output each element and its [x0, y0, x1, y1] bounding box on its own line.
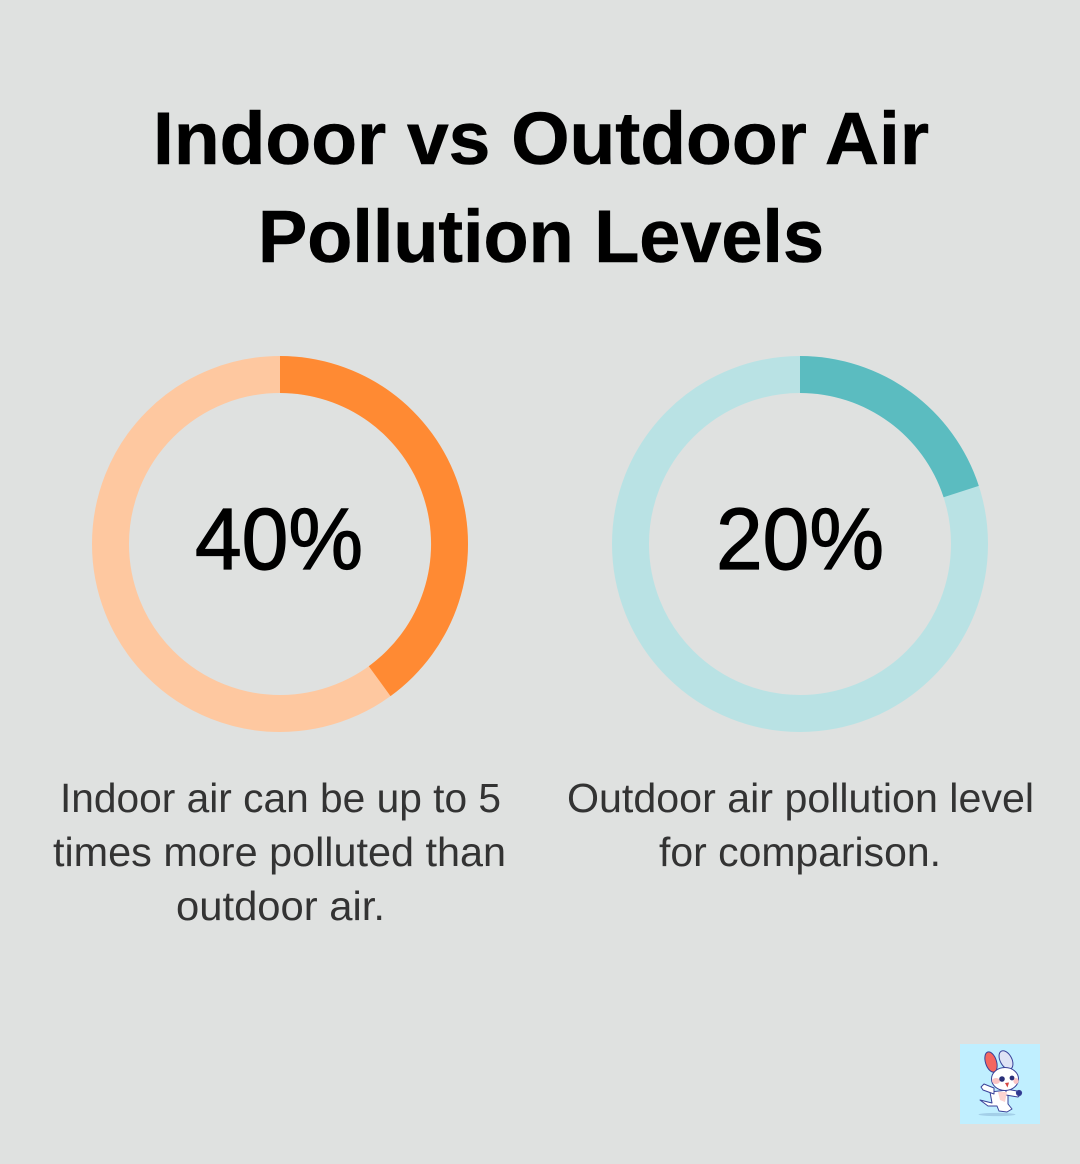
value: 20%: 20% — [716, 491, 884, 588]
panel: outdoor air — [567, 356, 1034, 875]
description: outdoor air: Outdoor air pollution level — [567, 775, 1034, 821]
description: indoor air — [53, 775, 506, 929]
icon: rabbit logo — [960, 1044, 1040, 1124]
description: indoor air: outdoor air. — [176, 883, 385, 929]
donut chart: outdoor 20% — [630, 356, 979, 714]
description: outdoor air — [567, 775, 1034, 875]
donut chart: indoor 40% — [110, 356, 468, 714]
description: indoor air: times more polluted than — [53, 829, 506, 875]
description: outdoor air: for comparison. — [659, 829, 941, 875]
value: 40%: 40% — [195, 491, 363, 588]
title — [153, 97, 929, 278]
description: indoor air: Indoor air can be up to 5 — [60, 775, 501, 821]
panel: indoor air — [53, 356, 506, 929]
title: Indoor vs Outdoor Air — [153, 97, 929, 180]
title: Pollution Levels — [258, 195, 824, 278]
